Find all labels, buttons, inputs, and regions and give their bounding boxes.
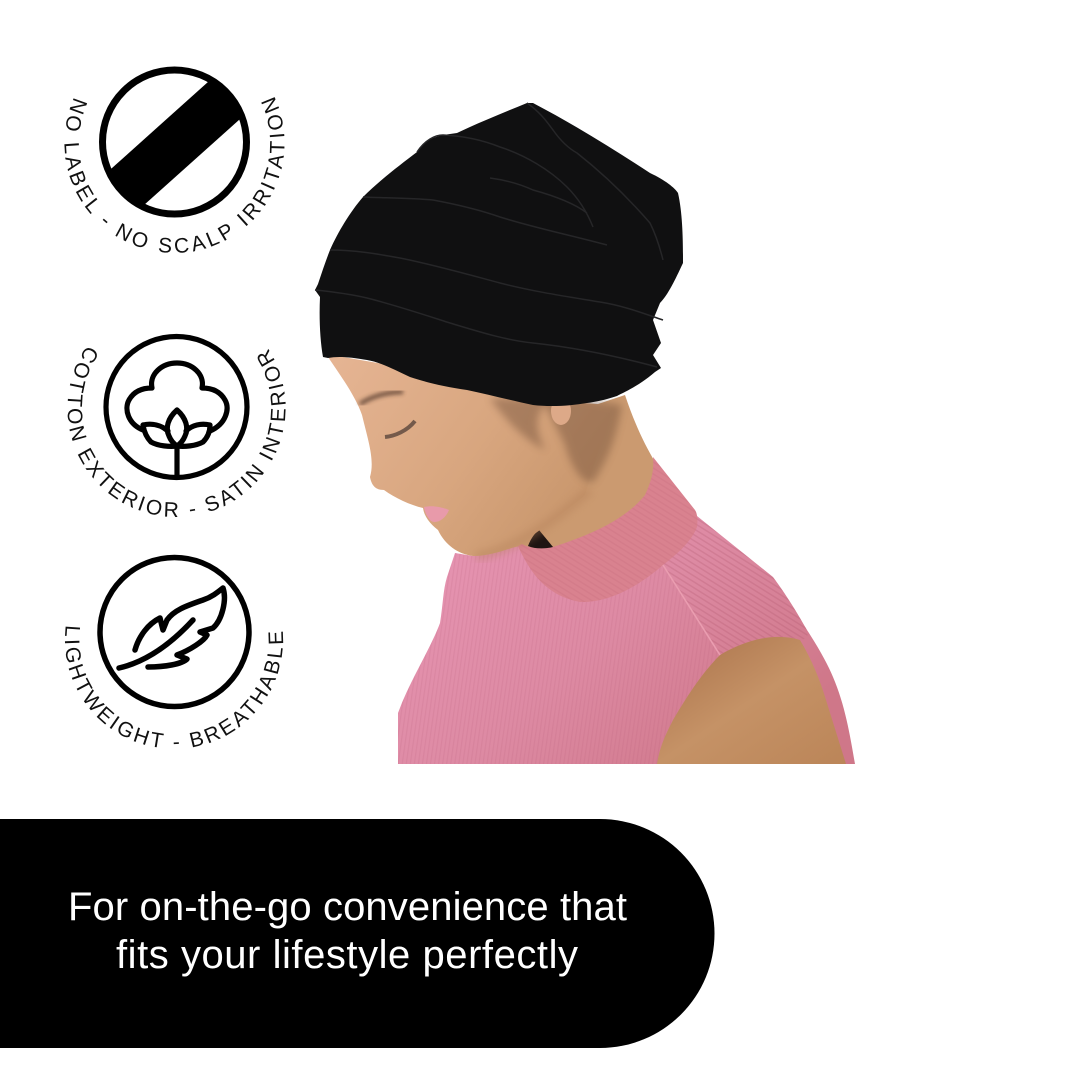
cap: seams <box>315 103 663 367</box>
eyebrow <box>360 392 403 404</box>
cap <box>315 103 683 406</box>
shirt <box>398 516 855 764</box>
banner shape <box>0 819 714 1048</box>
lips <box>424 506 449 522</box>
face <box>326 354 612 556</box>
icon: cotton plant <box>106 336 247 478</box>
neck <box>500 395 655 560</box>
caption text: fits your lifestyle perfectly <box>116 933 578 977</box>
icon badge: cotton <box>68 334 286 517</box>
icon: crossed circle <box>102 70 249 214</box>
hair at the nape <box>490 398 622 482</box>
eyelashes <box>385 421 415 437</box>
icon badge: feather <box>64 554 284 748</box>
icon: feather <box>100 558 249 706</box>
arm <box>657 637 846 764</box>
caption text <box>68 885 627 977</box>
collar <box>518 457 720 655</box>
curved label: feather: LIGHTWEIGHT - BREATHABLE <box>64 626 284 748</box>
curved label: cotton: COTTON EXTERIOR - SATIN INTERIOR <box>68 348 286 517</box>
shading: jaw line <box>476 490 590 556</box>
ear <box>551 397 571 425</box>
caption banner <box>0 819 714 1048</box>
curved label: no label: NO LABEL - NO SCALP IRRITATION <box>64 97 284 253</box>
caption text: For on-the-go convenience that <box>68 885 627 929</box>
photo: woman wearing black cap <box>315 103 855 764</box>
icon badge: no label <box>64 66 284 253</box>
